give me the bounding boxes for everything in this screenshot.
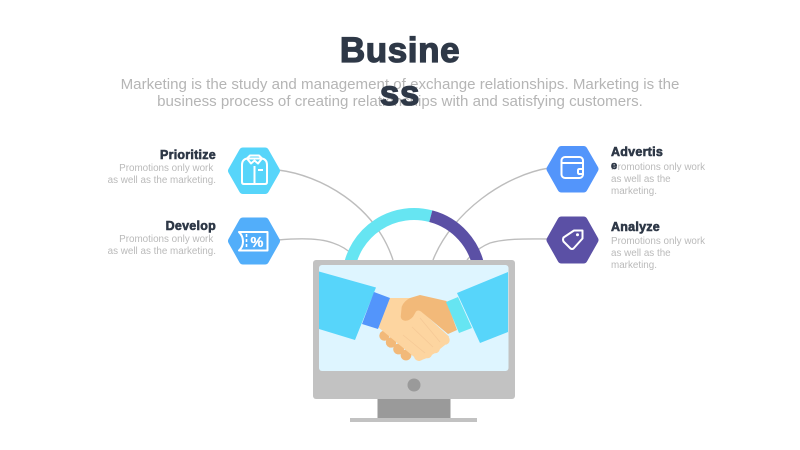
description: as well as the	[611, 174, 671, 185]
description: Promotions only work	[119, 163, 213, 174]
front hand	[378, 298, 450, 361]
label: Prioritize	[108, 148, 216, 186]
right cuff	[446, 297, 472, 333]
back fingers	[379, 331, 411, 360]
description	[108, 234, 216, 257]
label: Analyze	[610, 220, 705, 271]
heading: Analyze	[611, 220, 660, 234]
description: as well as the	[611, 248, 671, 259]
description: Promotions only work	[611, 162, 705, 173]
left sleeve	[319, 272, 376, 340]
icon: shirt hexagon	[232, 152, 276, 190]
left cuff	[362, 292, 390, 329]
handshake illustration	[319, 272, 508, 361]
top hand	[401, 295, 457, 334]
icon: wallet hexagon	[550, 150, 594, 188]
heading: Develop	[166, 219, 216, 233]
connector lines	[278, 168, 549, 260]
description: as well as the marketing.	[108, 246, 216, 257]
ring arc	[349, 214, 479, 270]
description: marketing.	[611, 186, 657, 197]
finger lines	[403, 318, 440, 353]
description	[611, 236, 705, 271]
icon: coupon hexagon	[232, 222, 276, 260]
monitor	[313, 260, 515, 422]
wrapped letter: e	[611, 160, 617, 172]
label: Advertise	[610, 145, 705, 197]
description: Promotions only work	[119, 234, 213, 245]
description	[108, 163, 216, 186]
heading: Advertis	[611, 145, 663, 159]
heading: Prioritize	[160, 148, 216, 162]
label: Develop	[108, 219, 216, 257]
right sleeve	[457, 272, 508, 343]
title: ss	[380, 74, 420, 113]
icon: coupon hexagon: %	[250, 235, 264, 251]
subtitle text: business process of creating relationships with and satisfying customers.	[157, 93, 643, 110]
description	[611, 162, 705, 197]
title	[340, 31, 460, 113]
title: Busine	[340, 31, 460, 70]
subtitle text	[121, 76, 679, 110]
description: as well as the marketing.	[108, 175, 216, 186]
icon: tag hexagon	[550, 220, 594, 260]
description: Promotions only work	[611, 236, 705, 247]
description: marketing.	[611, 260, 657, 271]
subtitle text: Marketing is the study and management of exchange relationships. Marketing is the	[121, 76, 679, 92]
